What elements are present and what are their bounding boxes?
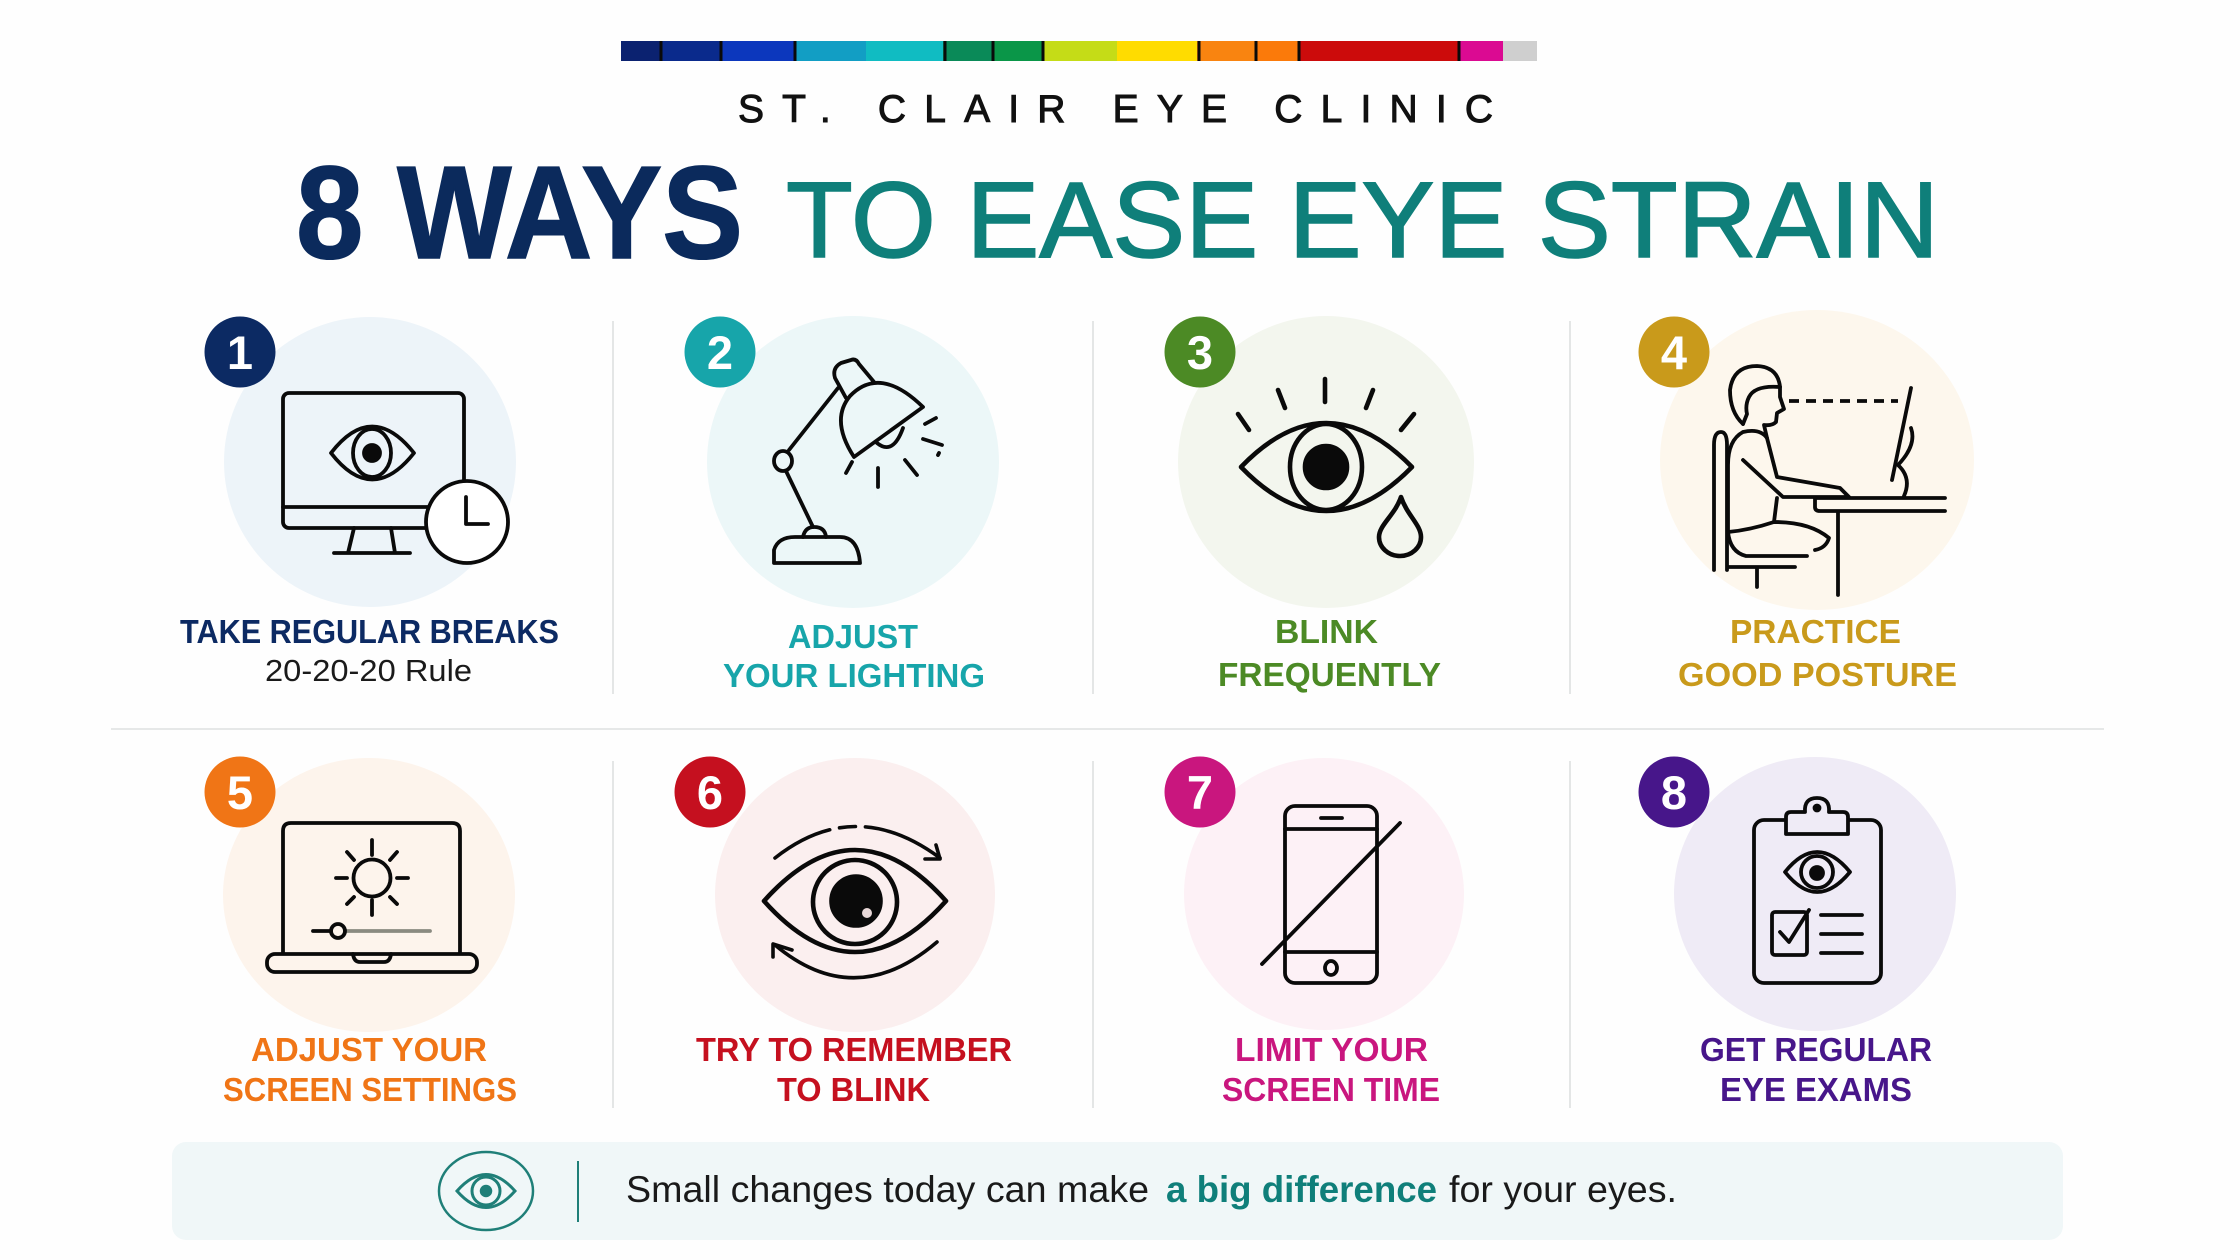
panel: step 4 practice good posture bbox=[1638, 310, 1974, 693]
label: limit your screen time bbox=[1222, 1031, 1440, 1108]
title bbox=[296, 139, 1939, 286]
label: limit your screen time: LIMIT YOUR bbox=[1235, 1031, 1428, 1068]
label: blink frequently: BLINK bbox=[1275, 613, 1378, 650]
label: blink frequently: FREQUENTLY bbox=[1218, 656, 1441, 693]
icon: eye with rotating arrows bbox=[764, 826, 946, 978]
badge 6: 6 bbox=[697, 766, 723, 819]
badge 7 bbox=[1164, 756, 1236, 828]
footer message: a big difference bbox=[1166, 1169, 1437, 1210]
badge 8: 8 bbox=[1661, 766, 1687, 819]
panel: step 6 try to remember to blink bbox=[674, 756, 1012, 1108]
badge 3 bbox=[1164, 316, 1236, 388]
badge 2: 2 bbox=[707, 326, 733, 379]
icon: crossed-out phone bbox=[1262, 806, 1400, 983]
label: limit your screen time: SCREEN TIME bbox=[1222, 1071, 1440, 1108]
badge 7: 7 bbox=[1187, 766, 1213, 819]
label: try to remember to blink bbox=[696, 1031, 1012, 1108]
icon: desk lamp bbox=[774, 360, 942, 563]
title: 8 WAYS bbox=[296, 139, 743, 286]
label: get regular eye exams: GET REGULAR bbox=[1700, 1031, 1932, 1068]
panel: step 8 get regular eye exams bbox=[1638, 756, 1956, 1108]
label: take regular breaks: TAKE REGULAR BREAKS bbox=[180, 613, 559, 650]
panel: step 3 blink frequently bbox=[1164, 316, 1474, 693]
badge 2 bbox=[684, 316, 756, 388]
badge 4: 4 bbox=[1661, 326, 1687, 379]
icon: eye in circle bbox=[439, 1152, 533, 1230]
badge 8 bbox=[1638, 756, 1710, 828]
panel: step 5 adjust screen settings bbox=[204, 756, 517, 1108]
label: adjust your lighting: YOUR LIGHTING bbox=[723, 657, 985, 694]
label: adjust your lighting: ADJUST bbox=[788, 618, 918, 655]
colour spectrum bar bbox=[621, 41, 1537, 61]
footer message bbox=[626, 1169, 1677, 1210]
icon: person at desk bbox=[1714, 366, 1945, 595]
label: adjust your lighting bbox=[723, 618, 985, 694]
label: blink frequently bbox=[1218, 613, 1441, 693]
label: practice good posture bbox=[1678, 613, 1957, 693]
label: try to remember to blink: TRY TO REMEMBER bbox=[696, 1031, 1012, 1068]
panel: step 1 take regular breaks bbox=[180, 316, 559, 688]
badge 1: 1 bbox=[227, 326, 253, 379]
badge 3: 3 bbox=[1187, 326, 1213, 379]
label: adjust your screen settings bbox=[223, 1031, 517, 1108]
label: adjust your screen settings: SCREEN SETTINGS bbox=[223, 1071, 517, 1108]
label: practice good posture: GOOD POSTURE bbox=[1678, 656, 1957, 693]
label: practice good posture: PRACTICE bbox=[1730, 613, 1901, 650]
panel: step 2 adjust your lighting bbox=[684, 316, 999, 694]
icon: clipboard with eye and checklist bbox=[1754, 798, 1881, 983]
badge 6 bbox=[674, 756, 746, 828]
badge 5 bbox=[204, 756, 276, 828]
badge 5: 5 bbox=[227, 766, 253, 819]
footer banner bbox=[172, 1142, 2063, 1240]
label: adjust your screen settings: ADJUST YOUR bbox=[251, 1031, 487, 1068]
sub-label: 20-20-20 rule: 20-20-20 Rule bbox=[265, 653, 472, 688]
label: get regular eye exams bbox=[1700, 1031, 1932, 1108]
clinic name: ST. CLAIR EYE CLINIC bbox=[738, 88, 1493, 131]
label: get regular eye exams: EYE EXAMS bbox=[1720, 1071, 1912, 1108]
badge 4 bbox=[1638, 316, 1710, 388]
icon: eye with tear drop bbox=[1238, 379, 1421, 556]
panel: step 7 limit your screen time bbox=[1164, 756, 1464, 1108]
badge 1 bbox=[204, 316, 276, 388]
title: TO EASE EYE STRAIN bbox=[786, 159, 1939, 280]
icon: monitor with eye and clock bbox=[283, 393, 508, 563]
footer message: Small changes today can make bbox=[626, 1169, 1149, 1210]
icon: laptop with brightness slider bbox=[267, 823, 477, 972]
footer message: for your eyes. bbox=[1449, 1169, 1677, 1210]
label: try to remember to blink: TO BLINK bbox=[777, 1071, 930, 1108]
